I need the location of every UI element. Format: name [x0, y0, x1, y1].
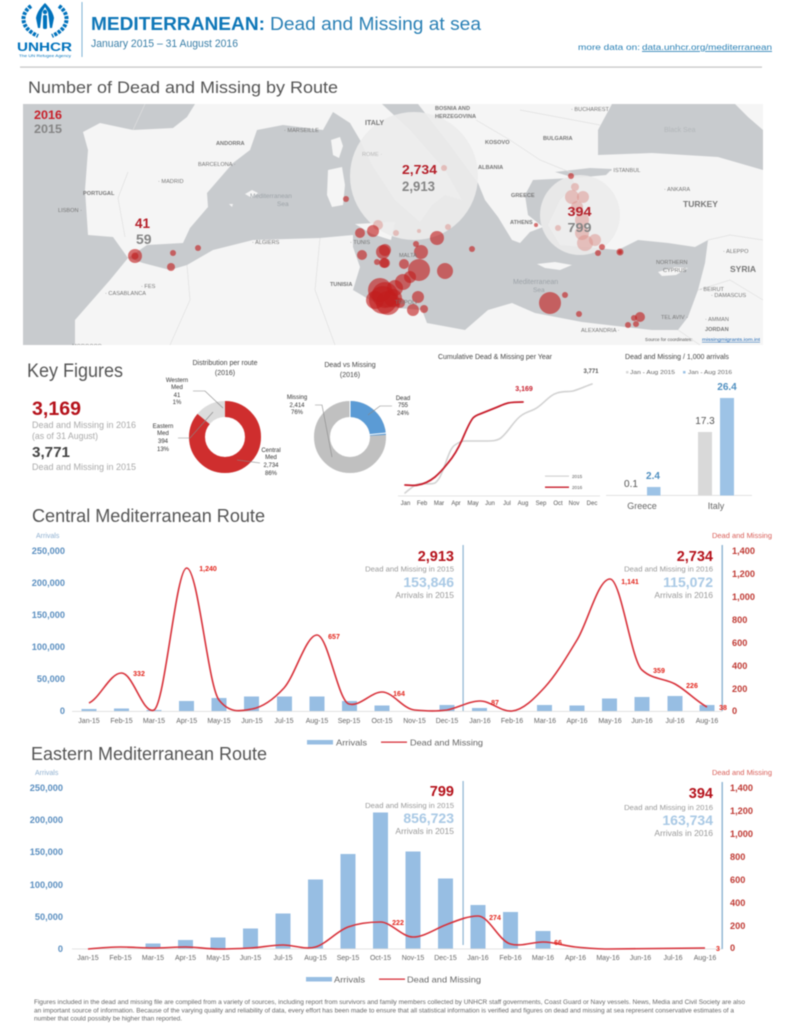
- panel: route map: [23, 104, 763, 350]
- donut chart: dead vs missing: 755: [398, 403, 409, 409]
- map legend: 2015: [34, 122, 62, 136]
- stats 2016: 394: [689, 786, 713, 802]
- figure 2016: 3,169: [32, 399, 81, 420]
- place names: Sea: [277, 201, 289, 208]
- place names: MALTA: [399, 253, 417, 259]
- arrivals bars: [146, 812, 550, 948]
- month axis: Nov: [569, 501, 579, 507]
- figure 2016: (as of 31 August): [32, 431, 98, 442]
- place names: PORTUGAL: [83, 191, 115, 197]
- donut chart: distribution per route: 1%: [173, 400, 182, 406]
- central route values: 2,734: [402, 162, 438, 177]
- heading: dead and missing by route: Number of Dead and Missing by Route: [28, 78, 338, 97]
- right axis: 1,400: [730, 783, 753, 793]
- line 2016: [405, 402, 523, 485]
- place names: ATHENS: [510, 220, 533, 226]
- panel: key figures: [27, 361, 136, 473]
- stats 2015: 856,723: [403, 810, 454, 826]
- month axis: Feb: [417, 501, 428, 507]
- data link: [578, 42, 772, 52]
- stats 2016: Arrivals in 2016: [654, 828, 713, 838]
- month labels: Jul-16: [663, 955, 683, 962]
- place names: TRIPOLI: [395, 300, 417, 306]
- data labels: 359: [653, 668, 665, 675]
- header: [17, 2, 772, 58]
- line legend: 2016: [572, 485, 583, 490]
- title: Dead and Missing at sea: [270, 13, 482, 34]
- place names: ANDORRA: [216, 141, 245, 147]
- donut chart: distribution per route: 41: [174, 393, 181, 399]
- donut chart: dead vs missing: Dead vs Missing: [324, 362, 376, 369]
- right axis: 200: [732, 684, 747, 694]
- data labels: 3: [716, 946, 720, 953]
- donut chart: distribution per route: 394: [158, 439, 169, 445]
- stats 2015: [365, 549, 454, 600]
- month axis: Jan: [401, 501, 410, 507]
- data labels: 226: [686, 683, 698, 690]
- heading: key figures: Key Figures: [27, 361, 123, 382]
- stats 2016: [624, 786, 713, 838]
- place names: TEL AVIV ·: [661, 315, 688, 321]
- bar legend: Jan - Aug 2015: [630, 370, 675, 376]
- donut chart: dead vs missing: 2,414: [289, 403, 305, 409]
- right axis: [730, 783, 753, 953]
- eastern route values: 799: [568, 220, 592, 235]
- stats 2016: 115,072: [663, 574, 713, 590]
- data labels: [392, 915, 720, 953]
- right axis: [732, 546, 755, 716]
- right axis: 600: [730, 875, 745, 885]
- footnote: Figures included in the dead and missing file are compiled from a variety of sources, including report from survivors and family members collected by UNHCR staff governments, Coast Guard or Navy vessels. News, Media and Civil Society are also: [34, 1000, 746, 1006]
- map source: missingmigrants.iom.int: [702, 337, 761, 342]
- title: [91, 13, 482, 34]
- bar chart: dead and missing per 1,000 arrivals: Italy: [708, 501, 725, 511]
- stats 2016: Dead and Missing in 2016: [624, 564, 713, 574]
- month labels: Apr-15: [175, 955, 196, 962]
- left axis: 250,000: [30, 783, 63, 793]
- left axis: 0: [60, 706, 65, 716]
- line legend: 2015: [572, 474, 583, 479]
- month labels: Apr-16: [566, 718, 588, 725]
- right axis: 800: [732, 615, 747, 625]
- data link: more data on:: [578, 42, 640, 52]
- right axis: 0: [732, 706, 737, 716]
- place names: BARCELONA ·: [198, 162, 236, 168]
- place names: [58, 106, 756, 350]
- data labels: 222: [392, 920, 404, 927]
- month labels: Feb-16: [499, 955, 522, 962]
- data labels: [133, 566, 727, 712]
- place names: · ANKARA: [664, 187, 690, 193]
- map source: [645, 337, 761, 342]
- month axis: Jun: [485, 501, 495, 507]
- stats 2015: Arrivals in 2015: [395, 590, 454, 600]
- panel: eastern mediterranean route: Dead and Missing: [712, 768, 772, 777]
- figure 2016: Dead and Missing in 2016: [32, 420, 136, 431]
- month labels: Feb-15: [109, 955, 132, 962]
- month labels: Aug-16: [694, 955, 716, 962]
- place names: NORTHERN: [656, 260, 688, 266]
- place names: ROME ·: [362, 152, 382, 158]
- stats 2016: 163,734: [662, 812, 713, 828]
- place names: · MARSEILLE: [284, 128, 319, 134]
- eastern route values: 394: [568, 204, 592, 219]
- footnote: [34, 1000, 746, 1022]
- data labels: 38: [719, 705, 727, 712]
- month labels: Mar-15: [142, 955, 164, 962]
- line chart: cumulative dead and missing: 3,169: [515, 386, 533, 393]
- place names: BOSNIA AND: [435, 106, 470, 112]
- right axis: 0: [730, 943, 735, 953]
- data labels: 274: [489, 915, 501, 922]
- incidents: red bubbles: [128, 173, 645, 328]
- month labels: Jun-15: [241, 718, 263, 725]
- month labels: Jun-16: [631, 718, 653, 725]
- place names: · TUNIS: [350, 240, 370, 246]
- donut chart: distribution per route: Distribution per route: [193, 360, 258, 367]
- donut chart: distribution per route: (2016): [215, 370, 235, 377]
- donut chart: distribution per route: Eastern: [153, 424, 173, 430]
- place names: BULGARIA: [543, 136, 573, 142]
- bar legend: Jan - Aug 2016: [688, 370, 732, 376]
- place names: Mediterranean: [513, 279, 558, 286]
- month labels: Sep-15: [338, 718, 360, 725]
- map legend: 2016: [34, 108, 62, 122]
- place names: GREECE: [511, 193, 535, 199]
- stats 2015: Dead and Missing in 2015: [365, 564, 454, 574]
- month labels: Nov-15: [403, 718, 426, 725]
- dead and missing line: [89, 568, 707, 711]
- donut chart: distribution per route: [153, 360, 281, 477]
- right axis: 600: [732, 638, 747, 648]
- western route values: 59: [136, 231, 152, 247]
- month labels: Jul-15: [273, 955, 293, 962]
- data labels: 164: [393, 691, 405, 698]
- line 2015: [405, 384, 592, 493]
- month axis: Oct: [553, 501, 563, 507]
- month labels: Jun-15: [240, 955, 261, 962]
- month labels: Mar-15: [143, 718, 165, 725]
- arrivals bars: [82, 696, 714, 711]
- icon: UNHCR logo: [17, 3, 73, 58]
- figure 2015: Dead and Missing in 2015: [32, 462, 136, 473]
- month labels: Oct-15: [370, 955, 391, 962]
- left axis: 250,000: [32, 546, 65, 556]
- month axis: Jul: [503, 501, 511, 507]
- month labels: Aug-15: [304, 955, 327, 962]
- place names: TURKEY: [683, 199, 718, 209]
- month axis: May: [467, 501, 479, 507]
- bar chart: dead and missing per 1,000 arrivals: Greece: [627, 501, 657, 511]
- stats 2015: 799: [430, 784, 454, 800]
- month labels: Mar-16: [532, 955, 554, 962]
- heading: eastern route: Eastern Mediterranean Route: [31, 744, 267, 764]
- month labels: Jul-15: [274, 718, 294, 725]
- place names: KOSOVO: [485, 140, 510, 146]
- month labels: Apr-15: [176, 718, 197, 725]
- panel: central mediterranean route: Arrivals: [36, 533, 60, 540]
- bar legend: [626, 370, 732, 376]
- right axis: 200: [730, 921, 745, 931]
- legend: Arrivals: [336, 738, 367, 748]
- month axis: Aug: [518, 501, 528, 507]
- western route values: [135, 216, 152, 247]
- place names: · FES: [141, 284, 156, 290]
- left axis: 50,000: [37, 674, 65, 684]
- place names: · AMMAN: [705, 317, 729, 323]
- title: MEDITERRANEAN:: [91, 13, 265, 34]
- place names: HERZEGOVINA: [435, 114, 476, 120]
- month labels: Jun-16: [630, 955, 651, 962]
- stats 2015: Dead and Missing in 2015: [365, 801, 454, 810]
- data labels: 87: [491, 700, 499, 707]
- donut chart: distribution per route: 2,734: [263, 463, 279, 469]
- western route values: 41: [135, 216, 151, 231]
- stats 2016: [624, 549, 713, 600]
- data labels: 1,141: [621, 579, 639, 586]
- month axis: Mar: [434, 501, 444, 507]
- month labels: Dec-15: [434, 955, 457, 962]
- line chart: cumulative dead and missing: [398, 354, 600, 507]
- month labels: [78, 718, 718, 725]
- place names: LISBON ·: [58, 208, 82, 214]
- month labels: Jan-16: [469, 718, 491, 725]
- donut chart: dead vs missing: 24%: [397, 411, 410, 417]
- month labels: May-15: [207, 718, 231, 725]
- place names: · ISTANBUL: [610, 168, 640, 174]
- month labels: Aug-16: [696, 718, 718, 725]
- central route values: 2,913: [402, 179, 435, 194]
- right axis: 1,200: [732, 569, 755, 579]
- icon: UNHCR logo: The UN Refugee Agency: [19, 54, 71, 58]
- place names: MOROCCO: [72, 344, 102, 350]
- place names: ALEXANDRIA ·: [581, 328, 620, 334]
- donut chart: distribution per route: 13%: [157, 447, 170, 453]
- month axis: Dec: [587, 501, 597, 507]
- right axis: 1,000: [730, 829, 753, 839]
- month labels: Dec-15: [436, 718, 458, 725]
- right axis: 1,000: [732, 592, 755, 602]
- place names: TUNISIA: [330, 282, 352, 288]
- month labels: Jan-15: [78, 718, 100, 725]
- left axis: 100,000: [30, 880, 63, 890]
- left axis: 200,000: [32, 578, 65, 588]
- legend: Dead and Missing: [410, 738, 483, 748]
- month labels: Nov-15: [402, 955, 424, 962]
- place names: Mediterranean: [250, 193, 292, 200]
- data link: data.unhcr.org/mediterranean: [642, 42, 772, 52]
- left axis: 0: [58, 944, 63, 954]
- icon: UNHCR logo: UNHCR: [17, 42, 73, 54]
- place names: · ALEPPO: [723, 249, 749, 255]
- panel: central mediterranean route: Dead and Missing: [712, 531, 772, 540]
- heading: central route: Central Mediterranean Route: [32, 506, 265, 526]
- place names: · CASABLANCA: [105, 291, 146, 297]
- donut chart: distribution per route: Central: [261, 448, 281, 454]
- panel: eastern mediterranean route: Arrivals: [35, 770, 59, 777]
- right axis: 400: [730, 898, 745, 908]
- place names: · ALGIERS: [252, 240, 280, 246]
- left axis: [32, 546, 65, 716]
- right axis: 800: [730, 852, 745, 862]
- stats 2015: 2,913: [418, 549, 454, 565]
- stats 2016: 2,734: [677, 549, 713, 565]
- month axis: Apr: [451, 501, 461, 507]
- month labels: Jul-16: [665, 718, 685, 725]
- incidents: faded within circles: [373, 165, 601, 251]
- donut chart: distribution per route: Western: [166, 378, 188, 384]
- donut chart: distribution per route: Med: [157, 431, 169, 437]
- month labels: Jan-16: [467, 955, 489, 962]
- stats 2015: 153,846: [403, 574, 454, 590]
- left axis: [30, 783, 63, 954]
- month labels: May-16: [598, 718, 622, 725]
- left axis: 100,000: [32, 642, 65, 652]
- place names: Sea: [533, 287, 545, 294]
- dead and missing line: [88, 916, 705, 949]
- place names: · DAMASCUS: [711, 293, 746, 299]
- figure 2015: [32, 444, 136, 473]
- footnote: an important source of information. Because of the varying quality and reliability of data, every effort has been made to ensure that all statistical information is verified and figures on dead and missing at sea represent conservative estimates of a: [34, 1008, 735, 1014]
- line legend: [545, 474, 583, 490]
- month labels: Apr-16: [565, 955, 586, 962]
- month labels: [77, 955, 716, 962]
- place names: SYRIA: [730, 264, 756, 274]
- stats 2016: Dead and Missing in 2016: [624, 803, 713, 812]
- bar chart: dead and missing per 1,000 arrivals: 2.4: [646, 471, 660, 482]
- month labels: Sep-15: [337, 955, 359, 962]
- left axis: 150,000: [30, 847, 63, 857]
- bar chart: dead and missing per 1,000 arrivals: 26.4: [717, 382, 737, 393]
- stats 2016: Arrivals in 2016: [654, 590, 713, 600]
- map legend: [34, 110, 62, 134]
- line chart: cumulative dead and missing: 3,771: [583, 369, 599, 375]
- data labels: 657: [328, 634, 340, 641]
- place names: · BEIRUT: [700, 287, 725, 293]
- bar chart: dead and missing per 1,000 arrivals: Dead and Missing / 1,000 arrivals: [625, 354, 729, 361]
- stats 2015: [365, 784, 454, 836]
- eastern route values: [567, 206, 592, 232]
- left axis: 150,000: [32, 610, 65, 620]
- panel: central mediterranean route: [32, 506, 772, 748]
- bar chart: dead and missing per 1,000 arrivals: [606, 354, 752, 511]
- month labels: Feb-16: [501, 718, 523, 725]
- central route circle: [350, 112, 478, 240]
- stats 2015: Arrivals in 2015: [395, 826, 454, 836]
- figure 2015: 3,771: [32, 444, 70, 461]
- donut chart: distribution per route: Med: [265, 455, 277, 461]
- place names: CYPRUS: [663, 268, 687, 274]
- eastern route circle: [540, 174, 600, 256]
- month labels: Oct-15: [371, 718, 393, 725]
- month labels: Mar-16: [534, 718, 556, 725]
- place names: ALBANIA: [478, 165, 503, 171]
- donut chart: dead vs missing: Missing: [287, 395, 307, 401]
- place names: Black Sea: [664, 127, 696, 134]
- figure 2016: [32, 399, 136, 442]
- legend: [306, 974, 481, 984]
- left axis: 200,000: [30, 815, 63, 825]
- donut chart: dead vs missing: [287, 362, 410, 465]
- data labels: 332: [133, 671, 145, 678]
- right axis: 1,400: [732, 546, 755, 556]
- month axis: Sep: [536, 501, 547, 507]
- bar chart: dead and missing per 1,000 arrivals: 17.3: [695, 416, 715, 427]
- donut chart: distribution per route: Med: [171, 385, 183, 391]
- central route values: [402, 162, 438, 194]
- place names: JORDAN: [705, 327, 729, 333]
- donut chart: dead vs missing: Dead: [396, 396, 410, 402]
- panel: eastern mediterranean route: [30, 744, 772, 984]
- legend: [307, 738, 483, 748]
- data labels: 1,240: [199, 566, 217, 573]
- place names: · BUCHAREST: [571, 107, 609, 113]
- map source: Source for coordinates:: [645, 337, 692, 342]
- donut chart: dead vs missing: 76%: [291, 410, 304, 416]
- data labels: 66: [554, 940, 562, 947]
- date range: January 2015 – 31 August 2016: [91, 38, 238, 50]
- month labels: May-15: [206, 955, 230, 962]
- right axis: 1,200: [730, 806, 753, 816]
- month labels: Jan-15: [77, 955, 99, 962]
- donut chart: dead vs missing: (2016): [340, 372, 360, 379]
- place names: ITALY: [365, 120, 384, 127]
- legend: Dead and Missing: [407, 974, 481, 984]
- left axis: 50,000: [35, 912, 63, 922]
- right axis: 400: [732, 661, 747, 671]
- legend: Arrivals: [334, 974, 365, 984]
- month labels: May-16: [596, 955, 620, 962]
- month labels: Feb-15: [110, 718, 133, 725]
- place names: · MADRID: [158, 179, 183, 185]
- bar chart: dead and missing per 1,000 arrivals: 0.1: [624, 479, 638, 490]
- donut chart: distribution per route: 86%: [265, 471, 278, 477]
- month axis: [401, 501, 597, 507]
- line chart: cumulative dead and missing: Cumulative Dead & Missing per Year: [438, 354, 553, 361]
- footnote: number that could possibly be higher than reported.: [34, 1016, 182, 1022]
- month labels: Aug-15: [306, 718, 328, 725]
